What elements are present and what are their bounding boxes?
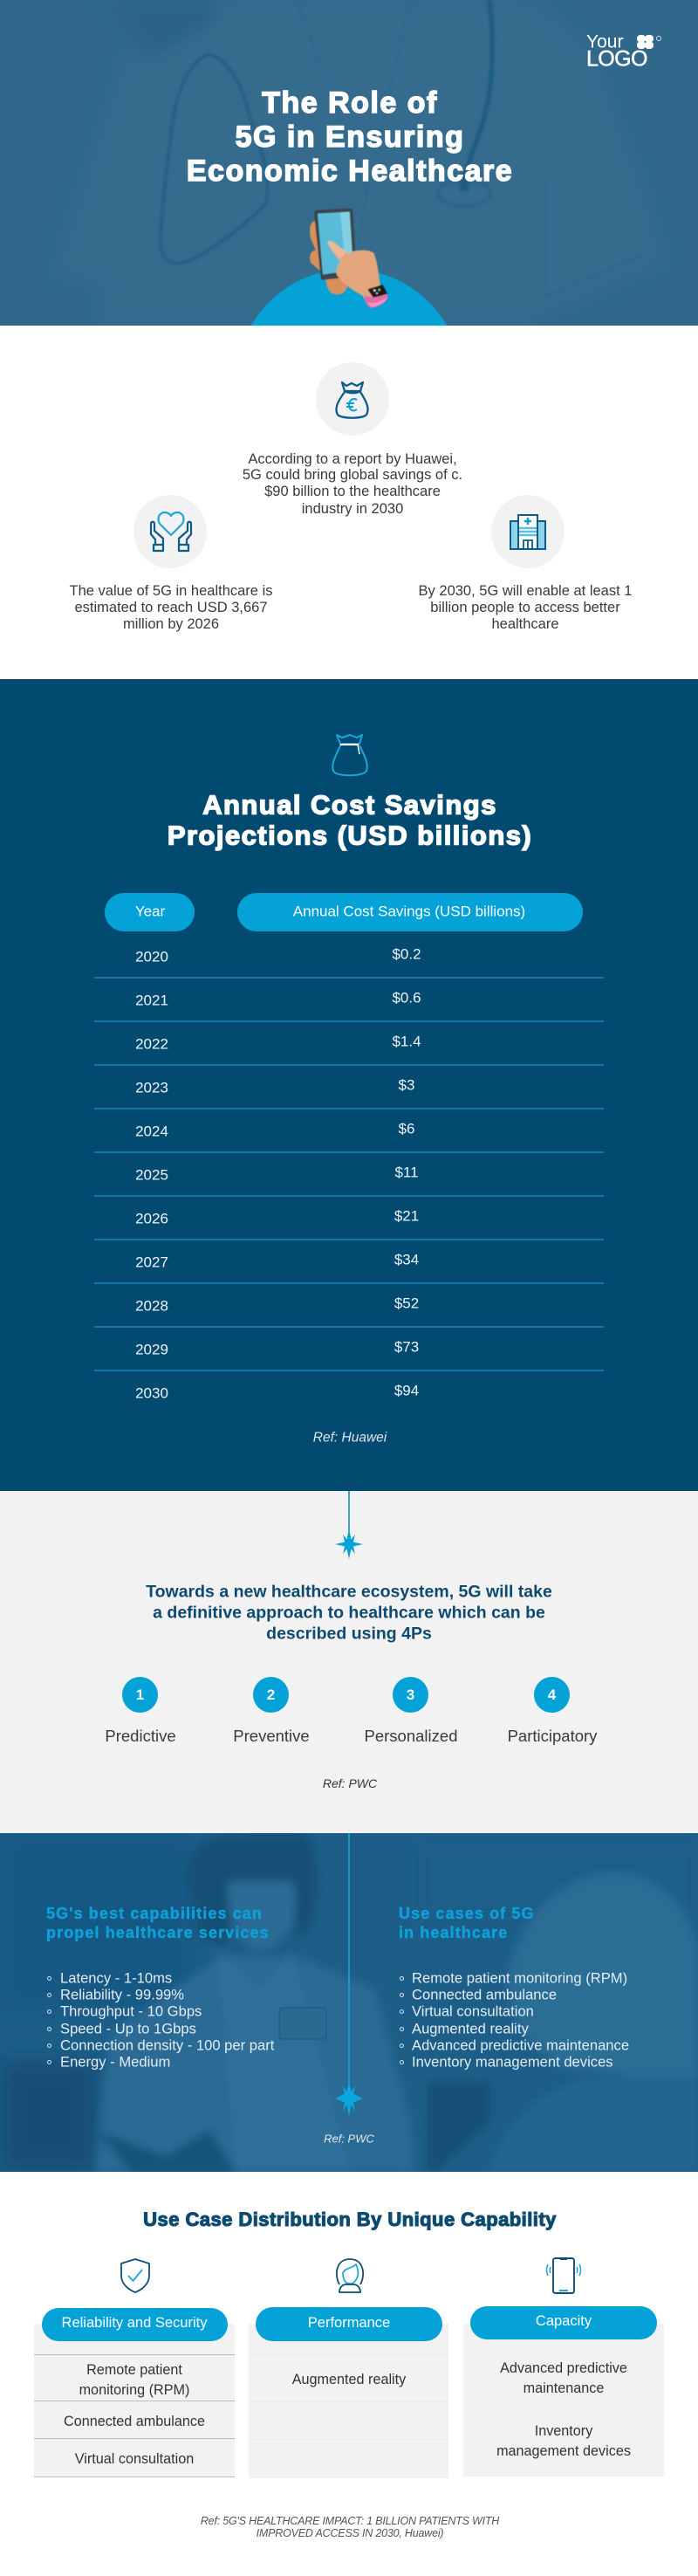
heading: Projections (USD billions): [168, 821, 532, 850]
bullet list: Latency - 1-10ms: [60, 1970, 172, 1987]
illustration: hand using a smartphone with smartwatch: [309, 208, 389, 309]
connector with star: [335, 1833, 363, 2116]
card body: monitoring (RPM): [79, 2382, 189, 2398]
reference: Huawei report: IMPROVED ACCESS IN 2030, Huawei): [257, 2527, 443, 2539]
item 1: Predictive: Predictive: [105, 1727, 176, 1745]
bullet list: Virtual consultation: [412, 2003, 534, 2020]
photo: doctor with patient: [0, 1833, 698, 2172]
reference: Huawei report: [201, 2515, 499, 2539]
reference: Huawei: Ref: Huawei: [313, 1430, 387, 1445]
icon: shield with check: [120, 2258, 150, 2293]
logo: LOGO: [586, 47, 647, 72]
panel: annual cost savings projections: [0, 679, 698, 1491]
card body: Remote patient: [86, 2362, 182, 2378]
bullet list: Throughput - 10 Gbps: [60, 2003, 202, 2020]
table: $21: [394, 1208, 419, 1224]
intro text: a definitive approach to healthcare which can be: [153, 1603, 545, 1622]
heading: in healthcare: [399, 1924, 508, 1941]
heading: Use Case Distribution By Unique Capability: [143, 2208, 557, 2230]
pill header: [42, 2308, 228, 2341]
heading: [168, 789, 532, 851]
text: Huawei savings: [243, 451, 462, 517]
bullet list: Reliability - 99.99%: [60, 1987, 184, 2003]
table: $1.4: [392, 1034, 421, 1049]
table: 2026: [135, 1210, 168, 1227]
item 1: Predictive: [105, 1677, 176, 1745]
blue semicircle: [236, 269, 462, 494]
text: Huawei savings: $90 billion to the healthcare: [264, 484, 441, 499]
item 2: Preventive: Preventive: [233, 1727, 310, 1745]
table: $3: [399, 1077, 414, 1093]
icon: money bag with euro: [316, 362, 389, 436]
table: 2028: [135, 1297, 168, 1315]
table header: savings: [237, 893, 583, 931]
text: Huawei savings: According to a report by Huawei,: [248, 451, 457, 467]
card body: Advanced predictive: [500, 2360, 627, 2376]
text: market value: [70, 583, 272, 632]
logo: Your: [586, 31, 623, 52]
table: $6: [399, 1121, 414, 1137]
card body: management devices: [496, 2443, 631, 2459]
text: access to care: [419, 583, 632, 632]
table header: savings: Annual Cost Savings (USD billions): [293, 903, 525, 920]
table header: Year: Year: [135, 903, 165, 920]
column: Capacity: [463, 2306, 664, 2476]
table: $34: [394, 1252, 419, 1267]
bullet list: Connected ambulance: [412, 1987, 557, 2003]
table: [94, 893, 604, 1402]
item 3: Personalized: Personalized: [365, 1727, 457, 1745]
panel: key statistics: [70, 362, 632, 632]
logo: [586, 31, 661, 72]
heading: [399, 1905, 535, 1941]
card body: Connected ambulance: [64, 2414, 205, 2429]
reference: PWC: Ref: PWC: [324, 2132, 374, 2146]
table: $94: [394, 1383, 419, 1398]
title: The Role of: [262, 86, 438, 120]
card body: Inventory: [535, 2423, 592, 2439]
column: capabilities: [46, 1905, 274, 2071]
pill header: [470, 2306, 657, 2339]
text: market value: million by 2026: [123, 616, 219, 632]
pill header: Capacity: [536, 2313, 592, 2329]
text: access to care: By 2030, 5G will enable at least 1: [419, 583, 632, 599]
bullet list: [400, 1970, 629, 2071]
hero banner: [0, 0, 698, 326]
text: Huawei savings: industry in 2030: [302, 501, 403, 517]
text: market value: estimated to reach USD 3,667: [74, 600, 268, 615]
bullet list: Energy - Medium: [60, 2054, 170, 2071]
icon: hands holding heart: [133, 495, 207, 568]
pill header: [256, 2307, 442, 2341]
card body: [249, 2324, 448, 2478]
intro text: Towards a new healthcare ecosystem, 5G will take: [146, 1582, 552, 1601]
card body: [34, 2324, 235, 2477]
panel: 4Ps ecosystem: [0, 1491, 698, 1833]
text: access to care: billion people to access better: [430, 600, 620, 615]
reference: PWC: Ref: PWC: [323, 1776, 377, 1790]
item 1: Predictive: 1: [136, 1686, 144, 1703]
intro text: [146, 1582, 552, 1643]
icon: phone with signal: [546, 2257, 581, 2294]
table: 2023: [135, 1079, 168, 1096]
item 2: Preventive: 2: [267, 1686, 275, 1703]
item 4: Participatory: Participatory: [508, 1727, 597, 1745]
bullet list: Advanced predictive maintenance: [412, 2037, 629, 2054]
card body: [463, 2324, 664, 2476]
bullet list: [47, 1970, 274, 2071]
column: Reliability and Security: [34, 2308, 235, 2477]
item 4: Participatory: 4: [548, 1686, 556, 1703]
text: access to care: healthcare: [491, 616, 559, 632]
heading: 5G's best capabilities can: [46, 1905, 263, 1922]
bullet list: Inventory management devices: [412, 2054, 613, 2071]
heading: Annual Cost Savings: [202, 789, 497, 821]
connector with star: [335, 1491, 363, 1559]
card body: maintenance: [524, 2380, 604, 2396]
bullet list: Augmented reality: [412, 2021, 529, 2037]
table: 2030: [135, 1384, 168, 1402]
table header: Year: [105, 893, 195, 931]
table: 2025: [135, 1166, 168, 1184]
panel: use case distribution: [34, 2208, 664, 2539]
icon: head with headset: [336, 2258, 364, 2293]
reference: Huawei report: Ref: 5G'S HEALTHCARE IMPACT: 1 BILLION PATIENTS WITH: [201, 2515, 499, 2527]
text: market value: The value of 5G in healthcare is: [70, 583, 272, 599]
panel: capabilities and use cases: [0, 1833, 698, 2172]
table: 2024: [135, 1123, 168, 1140]
column: use cases: [399, 1905, 629, 2071]
heading: Use cases of 5G: [399, 1905, 535, 1922]
column: Performance: [249, 2307, 448, 2478]
item 3: Personalized: 3: [407, 1686, 414, 1703]
hero photo: doctor with stethoscope: [161, 0, 495, 264]
icon: money bag outline: [332, 734, 368, 777]
text: Huawei savings: 5G could bring global savings of c.: [243, 467, 462, 483]
table: 2027: [135, 1254, 168, 1271]
table: $0.2: [392, 946, 421, 962]
item 2: Preventive: [233, 1677, 310, 1745]
bullet list: Connection density - 100 per part: [60, 2037, 274, 2054]
intro text: described using 4Ps: [266, 1624, 432, 1643]
title: 5G in Ensuring: [236, 120, 464, 154]
bullet list: Remote patient monitoring (RPM): [412, 1970, 627, 1987]
table: 2022: [135, 1035, 168, 1053]
title: [187, 86, 513, 188]
table: $73: [394, 1339, 419, 1355]
heading: propel healthcare services: [46, 1924, 270, 1941]
pill header: Reliability and Security: [62, 2315, 207, 2331]
item 3: Personalized: [365, 1677, 457, 1745]
table: $11: [394, 1164, 419, 1180]
item 4: Participatory: [508, 1677, 597, 1745]
table: $52: [394, 1295, 419, 1311]
title: Economic Healthcare: [187, 155, 513, 188]
pill header: Performance: [308, 2315, 390, 2331]
card body: Virtual consultation: [75, 2451, 194, 2467]
heading: [46, 1905, 270, 1941]
table: 2029: [135, 1341, 168, 1358]
table: 2021: [135, 992, 168, 1009]
card body: Augmented reality: [292, 2372, 406, 2387]
icon: hospital: [491, 495, 565, 568]
table: 2020: [135, 948, 168, 965]
table: $0.6: [392, 990, 421, 1006]
bullet list: Speed - Up to 1Gbps: [60, 2021, 196, 2037]
